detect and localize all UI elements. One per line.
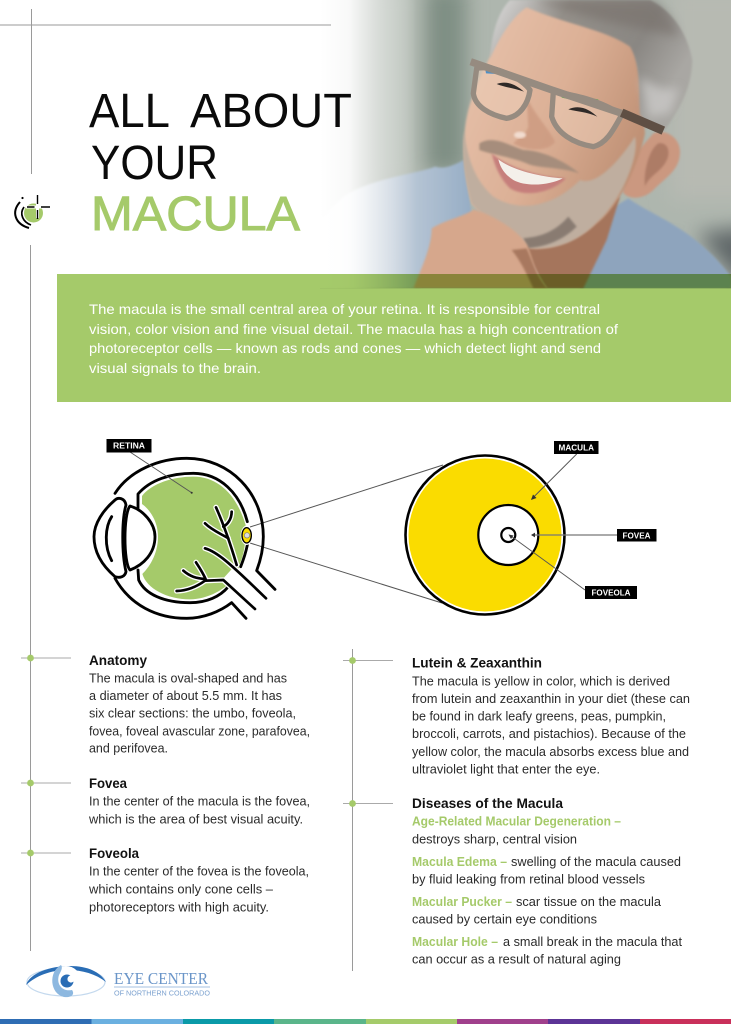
shirt left <box>353 160 472 288</box>
text block: anatomy: Anatomy <box>89 652 147 668</box>
logo: Eye Center of Northern Colorado: OF NORTHERN COLORADO <box>114 988 210 998</box>
text block: lutein and zeaxanthin: yellow color, the macula absorbs excess blue and <box>412 745 689 759</box>
intro text: The macula is the small central area of your retina. It is responsible for central <box>89 301 600 317</box>
text block: lutein and zeaxanthin: broccoli, carrots, and pistachios). Because of the <box>412 727 686 741</box>
title <box>89 85 352 241</box>
text block: anatomy <box>89 652 310 756</box>
text block: diseases of the macula: Macular Pucker – <box>412 895 512 909</box>
panel: introduction <box>57 274 731 402</box>
shirt right <box>580 198 731 288</box>
beard <box>463 132 636 249</box>
text block: diseases of the macula: scar tissue on the macula <box>516 895 661 909</box>
text block: anatomy: The macula is oval-shaped and has <box>89 672 287 686</box>
text block: foveola <box>88 845 309 914</box>
text block: lutein and zeaxanthin: be found in dark leafy greens, peas, pumpkin, <box>412 710 666 724</box>
text block: anatomy: six clear sections: the umbo, foveola, <box>89 706 296 720</box>
title: ALL <box>89 85 170 138</box>
text block: diseases of the macula: swelling of the macula caused <box>511 855 681 869</box>
nose shadow <box>514 102 554 150</box>
text block: lutein and zeaxanthin: The macula is yellow in color, which is derived <box>412 674 670 688</box>
retina green area <box>142 477 246 599</box>
header rule lines <box>0 9 352 971</box>
title: YOUR <box>91 137 218 190</box>
eye diagram <box>94 458 275 618</box>
text block: diseases of the macula: Macula Edema – <box>412 855 507 869</box>
text block: diseases of the macula: destroys sharp, central vision <box>412 832 577 846</box>
callout: retina: RETINA <box>113 442 145 451</box>
bottom colour bar <box>0 1019 731 1024</box>
icon: eye target <box>15 195 50 228</box>
text block: anatomy: fovea, foveal avascular zone, parafovea, <box>89 724 310 738</box>
text block: lutein and zeaxanthin <box>412 654 690 776</box>
mouth <box>492 153 566 193</box>
callout: fovea <box>531 529 656 542</box>
foveola circle <box>501 528 515 542</box>
text block: foveola: Foveola <box>89 845 139 861</box>
callout: retina <box>106 439 193 494</box>
macula enlarged diagram <box>406 456 564 614</box>
text block: anatomy: and perifovea. <box>89 742 168 756</box>
mustache <box>479 140 579 173</box>
neck <box>520 197 620 288</box>
face <box>464 3 645 249</box>
callout: foveola: FOVEOLA <box>592 589 631 598</box>
section markers right <box>343 657 393 807</box>
macula marker <box>241 526 253 545</box>
callout: macula: MACULA <box>558 444 594 453</box>
lens reflections <box>486 70 495 74</box>
lenses <box>476 70 527 116</box>
text block: diseases of the macula: Age-Related Macular Degeneration – <box>412 814 621 828</box>
text block: fovea: In the center of the macula is the fovea, <box>89 794 310 808</box>
callout: foveola <box>508 534 637 599</box>
blood vessels <box>177 507 267 610</box>
temple arm <box>622 113 663 131</box>
logo: Eye Center of Northern Colorado: EYE CENTER <box>114 969 209 988</box>
fovea circle <box>478 505 538 565</box>
text block: foveola: photoreceptors with high acuity. <box>89 900 269 914</box>
title: MACULA <box>91 188 300 241</box>
eyes <box>497 83 524 92</box>
glasses frame <box>471 62 622 147</box>
text block: diseases of the macula: can occur as a result of natural aging <box>412 952 621 966</box>
ear <box>623 132 680 198</box>
text block: fovea: Fovea <box>89 775 127 791</box>
logo: Eye Center of Northern Colorado <box>26 965 210 998</box>
text block: lutein and zeaxanthin: Lutein & Zeaxanthin <box>412 654 542 670</box>
text block: foveola: In the center of the fovea is the foveola, <box>89 864 309 878</box>
inner wall <box>138 473 247 522</box>
callout: fovea: FOVEA <box>622 531 651 540</box>
text block: diseases of the macula: caused by certain eye conditions <box>412 912 597 926</box>
text block: diseases of the macula: by fluid leaking from retinal blood vessels <box>412 872 645 886</box>
text block: lutein and zeaxanthin: ultraviolet light that enter the eye. <box>412 762 600 776</box>
text block: diseases of the macula <box>412 795 682 966</box>
text block: fovea: which is the area of best visual acuity. <box>88 812 303 826</box>
title: ABOUT <box>190 85 352 138</box>
callout: macula <box>531 441 598 500</box>
text block: fovea <box>88 775 310 826</box>
text block: diseases of the macula: Macular Hole – <box>412 935 498 949</box>
intro text <box>89 301 618 376</box>
intro text: vision, color vision and fine visual detail. The macula has a high concentration of <box>89 321 618 337</box>
section markers left <box>21 655 71 856</box>
hand <box>413 209 547 288</box>
text block: diseases of the macula: Diseases of the Macula <box>412 795 563 811</box>
hair <box>490 0 692 130</box>
text block: lutein and zeaxanthin: from lutein and zeaxanthin in your diet (these can <box>412 692 690 706</box>
lens <box>125 506 155 570</box>
text block: foveola: which contains only cone cells – <box>88 882 273 896</box>
intro text: visual signals to the brain. <box>89 360 261 376</box>
sclera <box>115 458 275 589</box>
text block: diseases of the macula: a small break in the macula that <box>503 935 682 949</box>
photo: smiling man with glasses <box>320 0 731 300</box>
cornea <box>94 498 126 577</box>
left fade <box>320 0 417 288</box>
text block: anatomy: a diameter of about 5.5 mm. It has <box>89 689 282 703</box>
connector lines: eye to macula <box>250 465 443 603</box>
logo mark <box>26 965 106 997</box>
intro text: photoreceptor cells — known as rods and cones — which detect light and send <box>89 340 601 356</box>
